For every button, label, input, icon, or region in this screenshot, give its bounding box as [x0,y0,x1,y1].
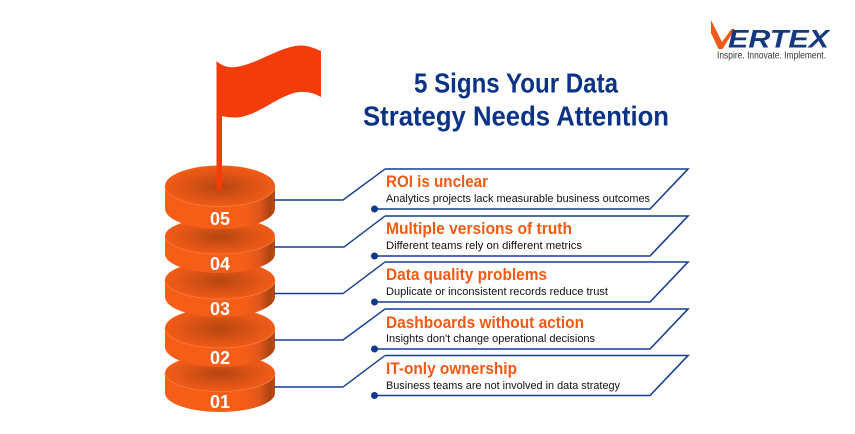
disc stack [165,166,275,412]
description 05: Analytics projects lack measurable business outcomes [386,193,650,205]
disc 04: 04 [210,254,230,274]
item 03: Data quality problems [274,262,688,306]
item 02: Dashboards without action [274,309,688,352]
disc 04 [165,218,275,274]
disc 03: 03 [210,299,230,319]
heading 01: IT-only ownership [386,360,517,378]
logo: Vertex [711,20,831,62]
label box 03 [374,262,688,302]
description 03: Duplicate or inconsistent records reduce trust [386,286,608,298]
description 04: Different teams rely on different metrics [386,240,583,252]
label box 04 [374,216,688,256]
logo tagline: Inspire. Innovate. Implement. [717,50,826,62]
heading 02: Dashboards without action [386,314,584,332]
item 05: ROI is unclear [274,169,688,212]
disc 01: 01 [210,392,230,412]
title [363,68,669,132]
connector 04 [274,216,385,247]
connector 01 [274,356,385,387]
connector 03 [274,262,385,294]
dot 03 [371,298,378,306]
heading 04: Multiple versions of truth [386,220,572,238]
title: Strategy Needs Attention [363,100,669,132]
disc 05: 05 [210,209,230,229]
dot 02 [371,346,378,352]
item 01: IT-only ownership [274,356,688,399]
disc 02 [165,308,275,368]
icon: flag [216,45,321,190]
connector 05 [274,169,385,200]
heading 05: ROI is unclear [386,173,489,191]
title: 5 Signs Your Data [414,68,618,98]
description 01: Business teams are not involved in data strategy [386,380,620,392]
label box 05 [374,169,688,209]
item 04: Multiple versions of truth [274,216,688,260]
disc 02: 02 [210,348,230,368]
label box 02 [374,309,688,349]
disc 01 [165,354,275,412]
description 02: Insights don't change operational decisions [386,333,595,345]
connector 02 [274,309,385,340]
heading 03: Data quality problems [386,266,547,284]
label box 01 [374,356,688,396]
logo wordmark: ERTEX [728,26,831,54]
dot 01 [371,392,378,399]
logo icon: V mark [711,20,735,49]
disc 05 [165,166,275,229]
dot 04 [371,252,378,260]
disc 03 [165,261,275,319]
dot 05 [371,206,378,212]
